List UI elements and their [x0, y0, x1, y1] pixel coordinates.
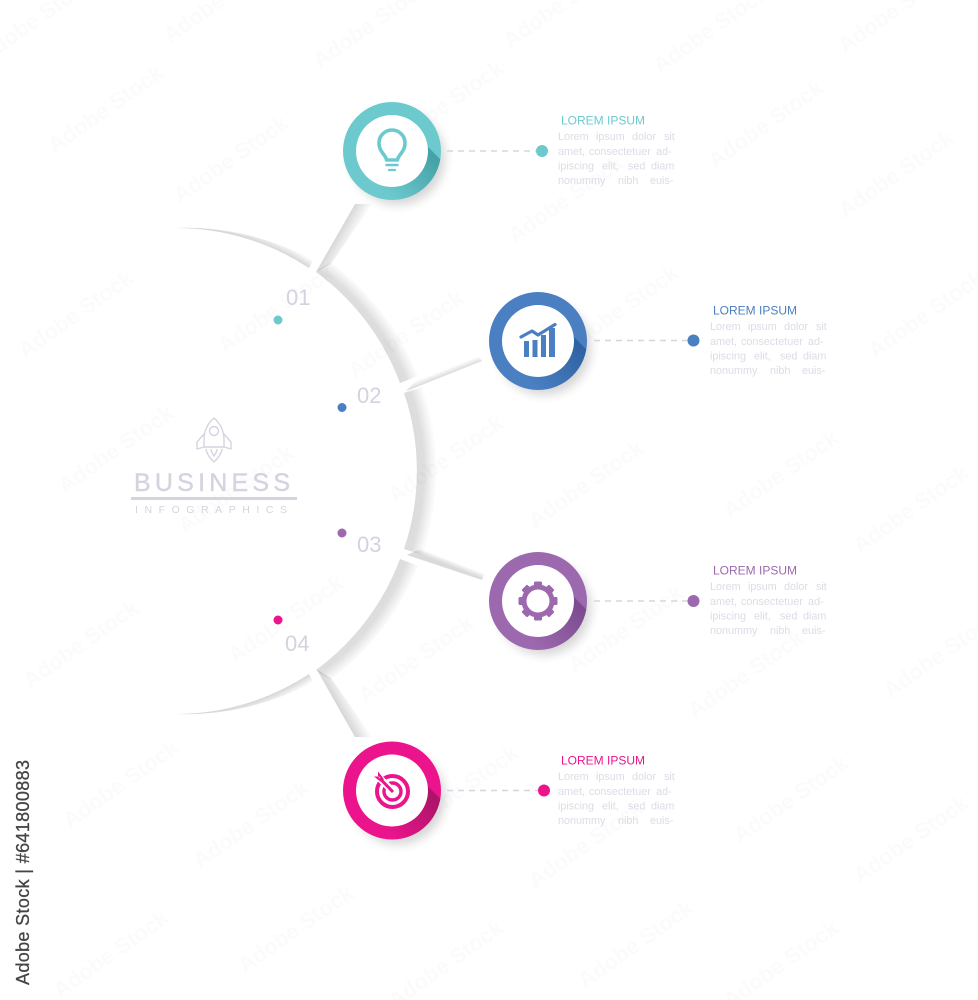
text block 4: nibh	[618, 815, 638, 827]
text block 1: ipiscing	[558, 160, 594, 172]
subheading: INFOGRAPHICS: INFOGRAPHICS	[135, 504, 287, 516]
text block 1: euis-	[650, 175, 674, 187]
watermark pattern: Adobe Stock	[728, 750, 854, 848]
watermark pattern: Adobe Stock	[683, 625, 809, 723]
leader line 3	[594, 595, 700, 607]
text block 2: sit	[816, 321, 827, 333]
connector 1 shadow	[316, 204, 372, 272]
text block 3	[710, 564, 827, 637]
watermark pattern: Adobe Stock	[223, 570, 349, 668]
text block 3: elit,	[754, 610, 771, 622]
text block 4: sed	[628, 800, 645, 812]
text block 3: ipiscing	[710, 610, 746, 622]
watermark pattern: Adobe Stock	[53, 400, 179, 498]
watermark pattern: Adobe Stock	[13, 265, 139, 363]
text block 1: sed	[628, 160, 645, 172]
connector 2 shadow	[406, 356, 482, 391]
arc segment 1	[175, 228, 313, 268]
step number 03	[338, 528, 381, 557]
watermark pattern: Adobe Stock	[168, 110, 294, 208]
text block 4	[558, 754, 675, 827]
watermark pattern: Adobe Stock	[383, 410, 509, 508]
text block 3: sed	[780, 610, 797, 622]
text block 1: consectetuer	[589, 146, 651, 158]
text block 3: dolor	[784, 581, 808, 593]
step number 04	[274, 616, 309, 656]
text block 4: consectetuer	[589, 786, 651, 798]
text block 4: ipiscing	[558, 800, 594, 812]
step 2 badge: blue	[489, 292, 594, 398]
text block 1: ad-	[656, 146, 672, 158]
text block 4: elit,	[602, 800, 619, 812]
watermark pattern: Adobe Stock	[353, 610, 479, 708]
watermark pattern: Adobe Stock	[188, 775, 314, 873]
text block 2: ad-	[808, 336, 824, 348]
watermark pattern: Adobe Stock	[718, 425, 844, 523]
watermark pattern: Adobe Stock	[58, 735, 184, 833]
watermark pattern: Adobe Stock	[563, 580, 689, 678]
text block 1	[558, 114, 675, 187]
icon: rocket	[197, 418, 231, 462]
text block 4: dolor	[632, 771, 656, 783]
watermark pattern: Adobe Stock	[48, 905, 174, 1000]
text block 1: LOREM IPSUM	[561, 114, 645, 128]
text block 3: ipsum	[748, 581, 777, 593]
text block 4: sit	[664, 771, 675, 783]
text block 4: ipsum	[596, 771, 625, 783]
watermark pattern: Adobe Stock	[173, 440, 299, 538]
text block 1: dolor	[632, 131, 656, 143]
text block 3: diam	[803, 610, 826, 622]
text block 3: euis-	[802, 625, 826, 637]
text block 2: sed	[780, 350, 797, 362]
icon: growth chart	[521, 324, 555, 357]
icon: light bulb	[379, 130, 405, 170]
connector 4 shadow	[317, 670, 372, 737]
stock credit: Adobe Stock | #641800883	[13, 760, 33, 985]
text block 1: sit	[664, 131, 675, 143]
watermark pattern: Adobe Stock	[43, 60, 169, 158]
text block 2: ipiscing	[710, 350, 746, 362]
text block 1: nibh	[618, 175, 638, 187]
text block 1: diam	[651, 160, 674, 172]
step number 01	[274, 285, 310, 324]
text block 3: LOREM IPSUM	[713, 564, 797, 578]
step number 01: 01	[286, 285, 310, 310]
watermark pattern: Adobe Stock	[213, 260, 339, 358]
step 1 badge: teal	[343, 102, 448, 208]
watermark pattern: Adobe Stock	[573, 895, 699, 993]
connector 3 shadow	[407, 549, 484, 580]
text block 2: consectetuer	[741, 336, 803, 348]
text block 2	[710, 304, 827, 377]
semicircle shadow segments	[175, 228, 446, 714]
heading rule	[131, 497, 297, 500]
text block 4: amet,	[558, 786, 585, 798]
watermark pattern: Adobe Stock	[343, 285, 469, 383]
text block 4: ad-	[656, 786, 672, 798]
text block 3: nonummy	[710, 625, 758, 637]
text block 2: LOREM IPSUM	[713, 304, 797, 318]
heading: BUSINESS: BUSINESS	[134, 469, 290, 497]
text block 3: nibh	[770, 625, 790, 637]
step number 04: 04	[285, 631, 309, 656]
watermark pattern: Adobe Stock	[523, 435, 649, 533]
leader line 2	[594, 334, 700, 346]
text block 2: diam	[803, 350, 826, 362]
text block 4: euis-	[650, 815, 674, 827]
text block 3: Lorem	[710, 581, 741, 593]
icon: gear	[518, 582, 558, 620]
text block 4: diam	[651, 800, 674, 812]
text block 1: elit,	[602, 160, 619, 172]
step 4 badge: magenta	[343, 742, 448, 848]
text block 3: sit	[816, 581, 827, 593]
text block 2: euis-	[802, 365, 826, 377]
text block 2: Lorem	[710, 321, 741, 333]
step number 02: 02	[357, 383, 381, 408]
text block 4: Lorem	[558, 771, 589, 783]
text block 3: ad-	[808, 596, 824, 608]
text block 2: dolor	[784, 321, 808, 333]
icon: target with arrow	[374, 772, 408, 807]
central title block	[131, 418, 297, 516]
watermark pattern: Adobe Stock	[848, 790, 974, 888]
watermark pattern: Adobe Stock	[833, 125, 959, 223]
watermark pattern: Adobe Stock	[848, 460, 974, 558]
text block 1: Lorem	[558, 131, 589, 143]
text block 3: consectetuer	[741, 596, 803, 608]
text block 2: amet,	[710, 336, 737, 348]
arc segment 5	[175, 674, 313, 714]
text block 2: ipsum	[748, 321, 777, 333]
text block 1: ipsum	[596, 131, 625, 143]
step number 02	[338, 383, 381, 412]
arc segment 2	[316, 262, 418, 383]
arc segment 4	[316, 559, 418, 680]
step 3 badge: purple	[489, 552, 594, 658]
watermark pattern: Adobe Stock	[703, 75, 829, 173]
text block 2: nonummy	[710, 365, 758, 377]
text block 4: LOREM IPSUM	[561, 754, 645, 768]
text block 1: nonummy	[558, 175, 606, 187]
leader line 4	[447, 784, 550, 796]
watermark pattern: Adobe Stock	[558, 260, 684, 358]
watermark pattern: Adobe Stock	[18, 595, 144, 693]
watermark pattern: Adobe Stock	[233, 880, 359, 978]
text block 4: nonummy	[558, 815, 606, 827]
text block 2: nibh	[770, 365, 790, 377]
watermark pattern: Adobe Stock	[503, 150, 629, 248]
text block 3: amet,	[710, 596, 737, 608]
step number 03: 03	[357, 532, 381, 557]
watermark pattern: Adobe Stock	[383, 55, 509, 153]
watermark pattern: Adobe Stock	[398, 740, 524, 838]
text block 2: elit,	[754, 350, 771, 362]
text block 1: amet,	[558, 146, 585, 158]
leader line 1	[447, 145, 548, 157]
arc segment 3	[404, 384, 446, 558]
watermark pattern: Adobe Stock	[523, 795, 649, 893]
